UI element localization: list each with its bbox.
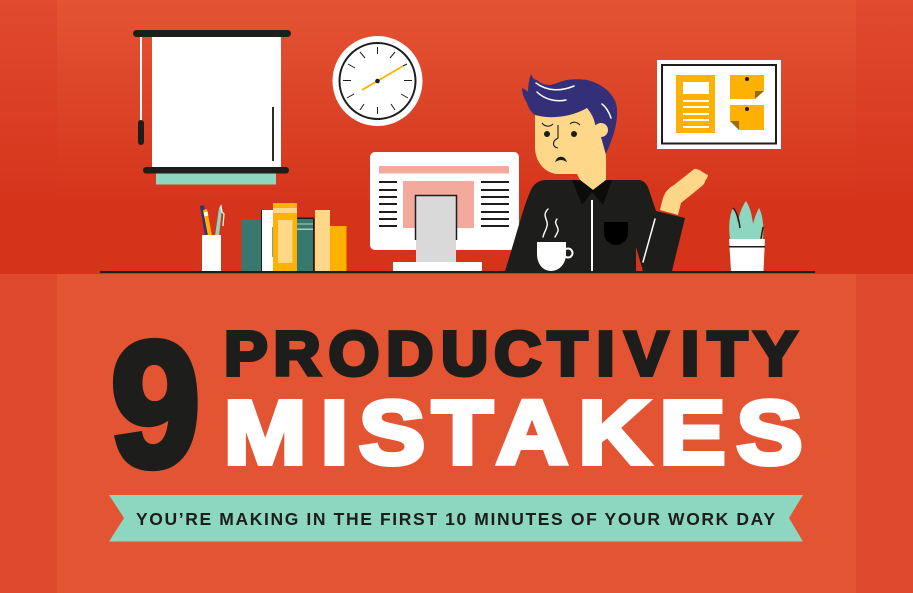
facial features — [542, 122, 580, 161]
subtitle: YOU’RE MAKING IN THE FIRST 10 MINUTES OF YOUR WORK DAY — [136, 509, 775, 529]
collar — [572, 180, 612, 205]
icon: projector screen — [133, 30, 291, 184]
hair highlights — [536, 83, 611, 118]
icon: wall clock — [332, 36, 422, 126]
icon: pencil cup — [200, 205, 224, 272]
coffee cup — [537, 242, 566, 271]
face and neck — [535, 108, 606, 190]
ribbon banner — [109, 495, 803, 542]
steam — [543, 209, 558, 237]
icon: potted plant — [729, 201, 765, 271]
icon: worried man at desk — [505, 74, 708, 271]
title: PRODUCTIVITY: PRODUCTIVITY — [224, 319, 797, 389]
hair — [522, 74, 617, 156]
title: numeral 9: 9 — [111, 306, 200, 504]
icon: pinboard — [657, 60, 781, 149]
pocket — [604, 222, 628, 245]
sleeve highlight — [643, 219, 655, 262]
icon: computer monitor — [370, 152, 519, 271]
icon: books — [242, 203, 346, 271]
title: MISTAKES: MISTAKES — [224, 383, 802, 483]
ear — [594, 123, 608, 137]
zipper — [591, 200, 593, 271]
hand — [660, 169, 708, 215]
jacket — [505, 180, 685, 271]
desk line — [100, 271, 815, 273]
